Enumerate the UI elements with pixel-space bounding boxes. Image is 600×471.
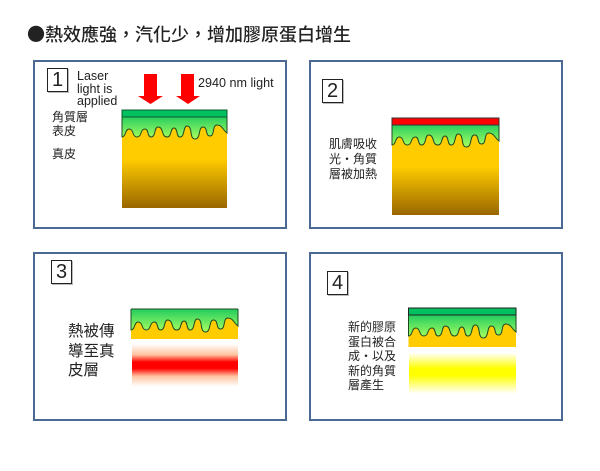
skin diagram 2 bbox=[392, 118, 499, 215]
title: ●熱效應強，汽化少，增加膠原蛋白增生 bbox=[27, 21, 351, 47]
text: step 2 description: 光・角質 bbox=[329, 152, 377, 166]
text: step 2 description: 肌膚吸收 bbox=[329, 137, 377, 151]
step number 1 bbox=[47, 68, 68, 92]
text: laser light is applied bbox=[77, 69, 117, 108]
label: stratum corneum and epidermis bbox=[52, 110, 88, 138]
panel: step 3 bbox=[33, 252, 287, 421]
step number 4: 4 bbox=[332, 272, 343, 294]
label: dermis: 真皮 bbox=[52, 147, 76, 161]
panel: step 2 bbox=[309, 60, 563, 229]
text: step 3 description bbox=[68, 322, 115, 379]
text: step 4 description: 新的膠原 bbox=[348, 320, 396, 334]
text: wavelength: 2940 nm light bbox=[198, 76, 274, 90]
text: step 2 description: 層被加熱 bbox=[329, 167, 377, 181]
text: step 2 description bbox=[329, 137, 377, 181]
text: step 4 description: 成・以及 bbox=[348, 349, 396, 363]
step number 4 bbox=[327, 271, 348, 295]
text: laser light is applied: applied bbox=[77, 94, 117, 108]
panel: step 1 bbox=[33, 60, 287, 229]
text: step 3 description: 導至真 bbox=[68, 342, 115, 360]
skin diagram 4 bbox=[408, 308, 516, 396]
step number 3 bbox=[51, 260, 72, 284]
arrow: right laser bbox=[176, 74, 200, 104]
skin diagram 1 bbox=[122, 110, 227, 208]
text: step 4 description: 新的角質 bbox=[348, 364, 396, 378]
text: step 4 description: 蛋白被合 bbox=[348, 334, 396, 348]
text: laser light is applied: light is bbox=[77, 82, 112, 96]
panel: step 4 bbox=[309, 252, 563, 421]
arrow: left laser bbox=[138, 74, 163, 104]
text: laser light is applied: Laser bbox=[77, 69, 108, 83]
text: step 3 description: 皮層 bbox=[68, 362, 99, 379]
step number 3: 3 bbox=[56, 261, 67, 283]
label: stratum corneum and epidermis: 角質層 bbox=[52, 110, 88, 124]
text: step 4 description: 層產生 bbox=[348, 378, 384, 392]
skin diagram 3 bbox=[130, 300, 240, 389]
step number 2 bbox=[322, 79, 343, 103]
label: stratum corneum and epidermis: 表皮 bbox=[52, 124, 76, 138]
step number 1: 1 bbox=[52, 69, 63, 91]
text: step 4 description bbox=[348, 320, 396, 392]
step number 2: 2 bbox=[327, 80, 338, 102]
text: step 3 description: 熱被傳 bbox=[68, 323, 115, 340]
